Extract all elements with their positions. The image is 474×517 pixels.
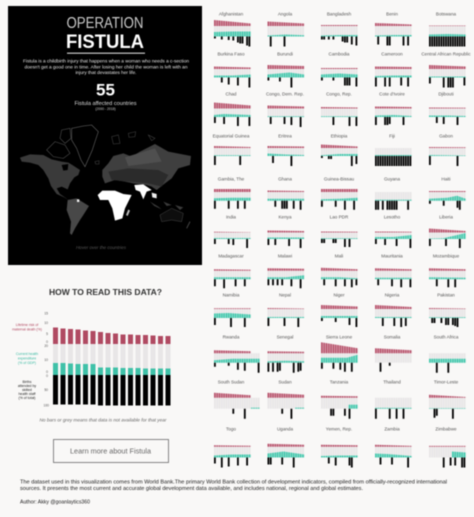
axis labels: 50 [44, 388, 48, 392]
footer text [20, 480, 447, 506]
grey backing bars [56, 344, 168, 375]
world map [20, 125, 191, 235]
chart: Mauritania: Mauritania [381, 254, 403, 259]
chart: Cameroon [375, 52, 412, 86]
chart: Gabon: Gabon [439, 134, 453, 139]
chart: Eritrea: Eritrea [278, 134, 292, 139]
chart: Gambia, The: Gambia, The [218, 177, 245, 182]
chart: Rwanda [214, 335, 260, 373]
chart: Ghana [268, 177, 304, 210]
chart: Nepal: Nepal [279, 293, 291, 298]
chart: Nepal [268, 293, 304, 327]
example bars [56, 328, 168, 406]
chart: Namibia [214, 293, 251, 327]
chart: Burkina Faso [214, 52, 251, 88]
chart: Senegal [268, 335, 304, 373]
chart: Uganda: Uganda [277, 427, 293, 432]
chart: South Sudan [214, 380, 260, 419]
chart: South Sudan: South Sudan [218, 380, 245, 385]
chart: Rwanda: Rwanda [223, 335, 240, 340]
legend label: health expenditure [16, 352, 38, 365]
legend label: lifetime risk [12, 323, 42, 332]
title underline [67, 53, 145, 54]
chart: Gabon [429, 134, 466, 166]
chart: India: India [226, 215, 236, 220]
chart: Lesotho: Lesotho [384, 215, 401, 220]
chart: Kenya [268, 215, 304, 248]
axis labels: 0 [46, 370, 48, 374]
map: South Asia (fistula countries) [134, 184, 152, 199]
chart: Mozambique: Mozambique [433, 254, 460, 259]
chart: Sierra Leone: Sierra Leone [326, 335, 353, 340]
map: Australia [160, 208, 183, 222]
axis labels: 20 [44, 344, 48, 348]
chart: Lesotho [375, 215, 412, 248]
chart: Burundi [268, 52, 304, 88]
chart: Bangladesh: Bangladesh [327, 11, 352, 16]
caption: years: (2000 - 2018) [95, 107, 116, 111]
chart: Togo [214, 427, 251, 468]
chart: Angola: Angola [278, 11, 293, 16]
chart: Mozambique [429, 254, 466, 287]
chart: Cambodia [321, 52, 358, 86]
footer text: sources. It presents the most current and accurate global development data available, and includes national, regional and global estimates. [20, 486, 363, 492]
chart: Tanzania [321, 380, 358, 419]
title: Operation: OPERATION [66, 15, 144, 32]
chart: Congo, Dem. Rep.: Congo, Dem. Rep. [266, 92, 304, 97]
chart: Mauritania [375, 254, 412, 287]
chart: Equatorial Guinea: Equatorial Guinea [213, 134, 250, 139]
chart: Mali: Mali [335, 254, 343, 259]
chart: Djibouti: Djibouti [438, 92, 454, 97]
chart: Bangladesh [321, 11, 358, 45]
intro text [23, 58, 189, 75]
chart: Botswana: Botswana [436, 11, 457, 16]
axis labels: 5 [46, 332, 48, 336]
map: Southeast Asia (fistula countries) [152, 193, 157, 198]
chart: Congo, Rep.: Congo, Rep. [326, 92, 352, 97]
title: Fistula: FISTULA [66, 32, 144, 53]
chart: India [214, 215, 251, 248]
chart: Chad [214, 92, 251, 126]
map: Madagascar [126, 209, 130, 216]
chart: Haiti: Haiti [441, 177, 451, 182]
chart: Timor-Leste: Timor-Leste [434, 380, 459, 385]
chart: Zambia: Zambia [384, 427, 400, 432]
chart: Niger: Niger [334, 293, 345, 298]
chart: Ethiopia: Ethiopia [331, 134, 348, 139]
chart: Cote d'Ivoire [375, 92, 412, 125]
chart: Madagascar [214, 254, 251, 288]
red bars [56, 328, 168, 344]
map: North America [20, 154, 80, 200]
chart: Gambia, The [214, 177, 251, 209]
legend label: births attended: health staff [18, 392, 36, 396]
chart: Zambia [375, 427, 412, 468]
chart: Malawi: Malawi [278, 254, 292, 259]
chart: Botswana [429, 11, 466, 46]
map: Russia [125, 148, 162, 166]
chart: Congo, Rep. [321, 92, 358, 126]
chart: Mali [321, 254, 358, 287]
axis labels: 15 [44, 312, 48, 316]
chart: Liberia [429, 215, 466, 248]
chart: Sudan: Sudan [278, 380, 292, 385]
map: New Zealand [187, 222, 190, 228]
axis labels: 10 [44, 321, 48, 325]
chart: Eritrea [268, 134, 304, 166]
chart: Uganda [268, 427, 304, 468]
chart: Timor-Leste [429, 380, 466, 419]
chart: Angola [268, 11, 304, 46]
chart: Chad: Chad [226, 92, 237, 97]
chart: Yemen, Rep. [321, 427, 358, 468]
chart: Central African Republic [421, 52, 471, 88]
chart: South Africa [429, 335, 466, 373]
chart: Tanzania: Tanzania [330, 380, 349, 385]
map: Indonesia and Philippines [150, 202, 183, 210]
chart: Zimbabwe [429, 427, 466, 468]
map: Africa (fistula countries) [98, 191, 132, 221]
chart: Kenya: Kenya [278, 215, 292, 220]
chart: Liberia: Liberia [439, 215, 453, 220]
map: Eurasia [102, 144, 191, 190]
map: French Guiana speck [77, 199, 79, 202]
chart: Sudan [268, 380, 304, 419]
footer text: The dataset used in this visualization comes from World Bank.The primary World Bank collection of development indicators, compiled from officially-recognized international [20, 480, 447, 486]
chart: Cambodia: Cambodia [329, 52, 350, 57]
axis labels [43, 312, 49, 408]
big number: 55: 55 [96, 80, 115, 100]
chart: Somalia: Somalia [384, 335, 401, 340]
black bars [56, 375, 168, 406]
note: No bars or grey means that data is not available for that year [40, 418, 167, 424]
chart: Benin [375, 11, 412, 45]
chart: Guyana [375, 177, 412, 210]
chart: Djibouti [429, 92, 466, 125]
chart: Togo: Togo [226, 427, 236, 432]
chart: Madagascar: Madagascar [218, 254, 244, 259]
legend label: births attended: skilled [22, 388, 32, 392]
chart: Fiji: Fiji [389, 134, 395, 139]
legend label: births attended: (% of total) [19, 396, 35, 400]
axis labels: 10 [44, 358, 48, 362]
chart: Haiti [429, 177, 466, 210]
legend label: health expenditure: Current health [16, 352, 38, 356]
chart: Guinea-Bissau: Guinea-Bissau [324, 177, 355, 182]
legend label: births attended: attended by [18, 384, 36, 388]
chart: Burkina Faso: Burkina Faso [217, 52, 245, 57]
chart: Afghanistan [214, 11, 251, 46]
map: Central Asia [108, 168, 168, 187]
chart: Thailand: Thailand [383, 380, 401, 385]
map: Greenland and arctic outlines [47, 125, 155, 167]
chart: Lao PDR: Lao PDR [330, 215, 349, 220]
chart: Namibia: Namibia [223, 293, 240, 298]
chart: Zimbabwe: Zimbabwe [435, 427, 457, 432]
map: Hudson Bay [62, 164, 68, 171]
chart: Guinea-Bissau [321, 177, 358, 210]
chart: Burundi: Burundi [277, 52, 293, 57]
legend label: births attended [18, 380, 36, 400]
axis labels: 0 [46, 340, 48, 344]
chart: Ghana: Ghana [278, 177, 292, 182]
map: South America [67, 198, 89, 235]
heading: HOW TO READ THIS DATA? [49, 288, 162, 297]
chart: Senegal: Senegal [277, 335, 293, 340]
chart: Congo, Dem. Rep. [266, 92, 304, 127]
button: Learn more about Fistula [70, 448, 151, 456]
chart: Pakistan: Pakistan [437, 293, 455, 298]
intro text: injury that devastates her life. [76, 70, 136, 75]
chart: Pakistan [429, 293, 466, 327]
chart: Central African Republic: Central African Republic [421, 52, 471, 57]
chart: Lao PDR [321, 215, 358, 247]
chart: Afghanistan: Afghanistan [219, 11, 244, 16]
chart: Cameroon: Cameroon [381, 52, 403, 57]
chart: Nigeria: Nigeria [385, 293, 400, 298]
chart: Yemen, Rep.: Yemen, Rep. [326, 427, 352, 432]
chart: Somalia [375, 335, 412, 372]
teal bars [56, 363, 168, 375]
chart: Sierra Leone [321, 335, 358, 372]
footer text: Author: Akky @goanlaytics360 [20, 500, 90, 506]
chart: Niger [321, 293, 358, 327]
intro text: doesn't get a good one in time. After losing her child the woman is left with an [24, 64, 188, 70]
chart: Benin: Benin [386, 11, 398, 16]
chart: Fiji [375, 134, 412, 166]
legend label: health expenditure: (% of GDP) [18, 361, 36, 365]
panel: how to read this data [12, 288, 168, 462]
chart: Equatorial Guinea [213, 134, 251, 165]
chart: Nigeria [375, 293, 412, 327]
chart: Guyana: Guyana [384, 177, 400, 182]
chart: Thailand [375, 380, 412, 419]
axis labels: 0 [46, 374, 48, 378]
legend label: lifetime risk: maternal death (%) [12, 328, 42, 332]
chart: Cote d'Ivoire: Cote d'Ivoire [379, 92, 405, 97]
intro text: Fistula is a childbirth injury that happens when a woman who needs a c-section [23, 58, 189, 64]
legend label: lifetime risk: Lifetime risk of [16, 323, 38, 327]
panel: small multiples by country [213, 11, 471, 468]
chart: South Africa: South Africa [434, 335, 459, 340]
panel: intro with world map [8, 6, 202, 265]
legend label: births attended: Births [23, 380, 32, 384]
axis labels: 100 [43, 404, 49, 408]
button [54, 440, 168, 462]
chart: Malawi [268, 254, 304, 288]
chart: Ethiopia [321, 134, 358, 166]
legend label: health expenditure: expenditure [18, 356, 36, 360]
caption: affected countries: Fistula affected countries [74, 101, 137, 107]
hover hint: Hover over the countries [76, 245, 127, 250]
